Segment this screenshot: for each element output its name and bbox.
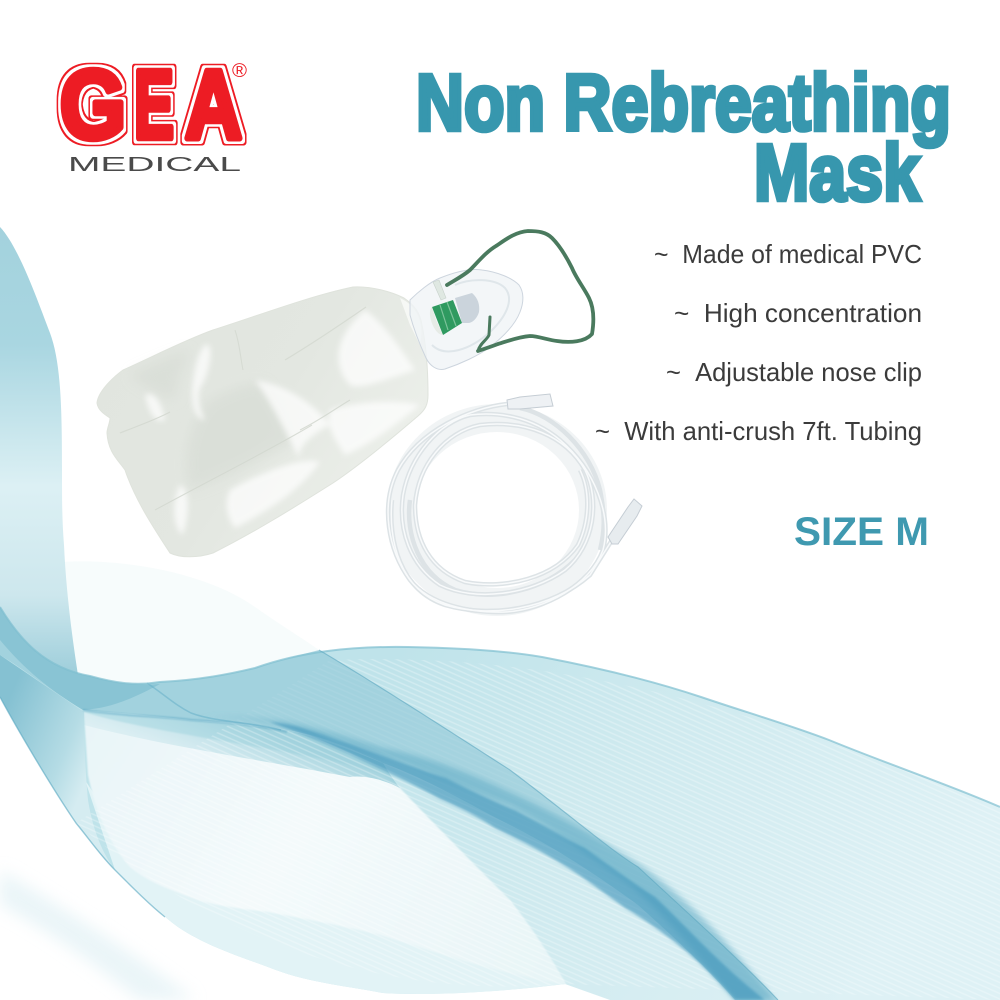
mask green connector [432, 300, 462, 335]
title line 2: Mask [754, 128, 920, 217]
product: oxygen tubing [388, 394, 642, 612]
wave: pale inner sheet [84, 712, 566, 984]
feature: tubing: ~ With anti-crush 7ft. Tubing [595, 416, 922, 446]
wave: medium teal band [0, 607, 778, 1000]
mask inner contour [432, 280, 509, 351]
tube connector right [608, 499, 642, 544]
wave: upper left band [0, 227, 78, 673]
bag body [97, 287, 428, 557]
nose clip [433, 280, 446, 300]
logo: GEA letters with outline: G [60, 50, 126, 159]
bag shading [130, 350, 295, 490]
wave: soft smear lower left [0, 870, 195, 1000]
feature: nose clip: ~ Adjustable nose clip [666, 357, 922, 387]
wave: ribbon core [270, 722, 765, 1000]
mask grey cylinder [455, 293, 479, 323]
wave: lower ribbon strand [83, 710, 287, 732]
tube coils [388, 404, 612, 612]
feature: high concentration: ~ High concentration [674, 298, 922, 328]
wave: strand from crest to ribbon [147, 683, 281, 730]
connector ribs [440, 302, 456, 330]
tube connector top [507, 394, 553, 409]
wave: top edge line [0, 607, 1000, 807]
logo: GEA letters with outline: A [185, 50, 242, 159]
logo: GEA letters with outline [60, 50, 242, 159]
tube ring haze [401, 418, 593, 602]
bag neck fold [400, 298, 421, 345]
tube shine [388, 404, 612, 612]
size label: SIZE M [794, 510, 929, 554]
wave: main sheet [1, 647, 1000, 1000]
wave: ribbon glow [190, 716, 775, 1000]
logo: medical wordmark: MEDICAL [68, 154, 241, 176]
product: oxygen mask [410, 231, 593, 369]
wave: diagonal fold line [319, 650, 778, 1000]
wave: band top left darker [0, 607, 160, 710]
wave: left edge line [0, 697, 165, 917]
strap clip lower [478, 317, 490, 351]
connector mouth [430, 307, 443, 335]
wave: left edge fold [0, 655, 115, 870]
bag crease lines [120, 307, 366, 510]
background wave graphic [0, 227, 1000, 1000]
feature: medical PVC: ~ Made of medical PVC [654, 239, 922, 269]
logo: registered mark: ® [232, 61, 247, 82]
bag highlights [145, 310, 420, 535]
wave: pale lower strip [85, 780, 566, 994]
wave: pale translucent sheet [60, 561, 400, 800]
product: reservoir bag [97, 287, 428, 557]
wave: mesh texture [76, 659, 1000, 1000]
logo: GEA letters with outline: E [134, 50, 174, 159]
wave: shading below ribbon [84, 712, 400, 788]
title [416, 58, 951, 217]
elastic strap [447, 231, 593, 351]
mask shell [410, 269, 523, 369]
feature list [595, 239, 922, 446]
logo: GEA medical [60, 50, 247, 176]
